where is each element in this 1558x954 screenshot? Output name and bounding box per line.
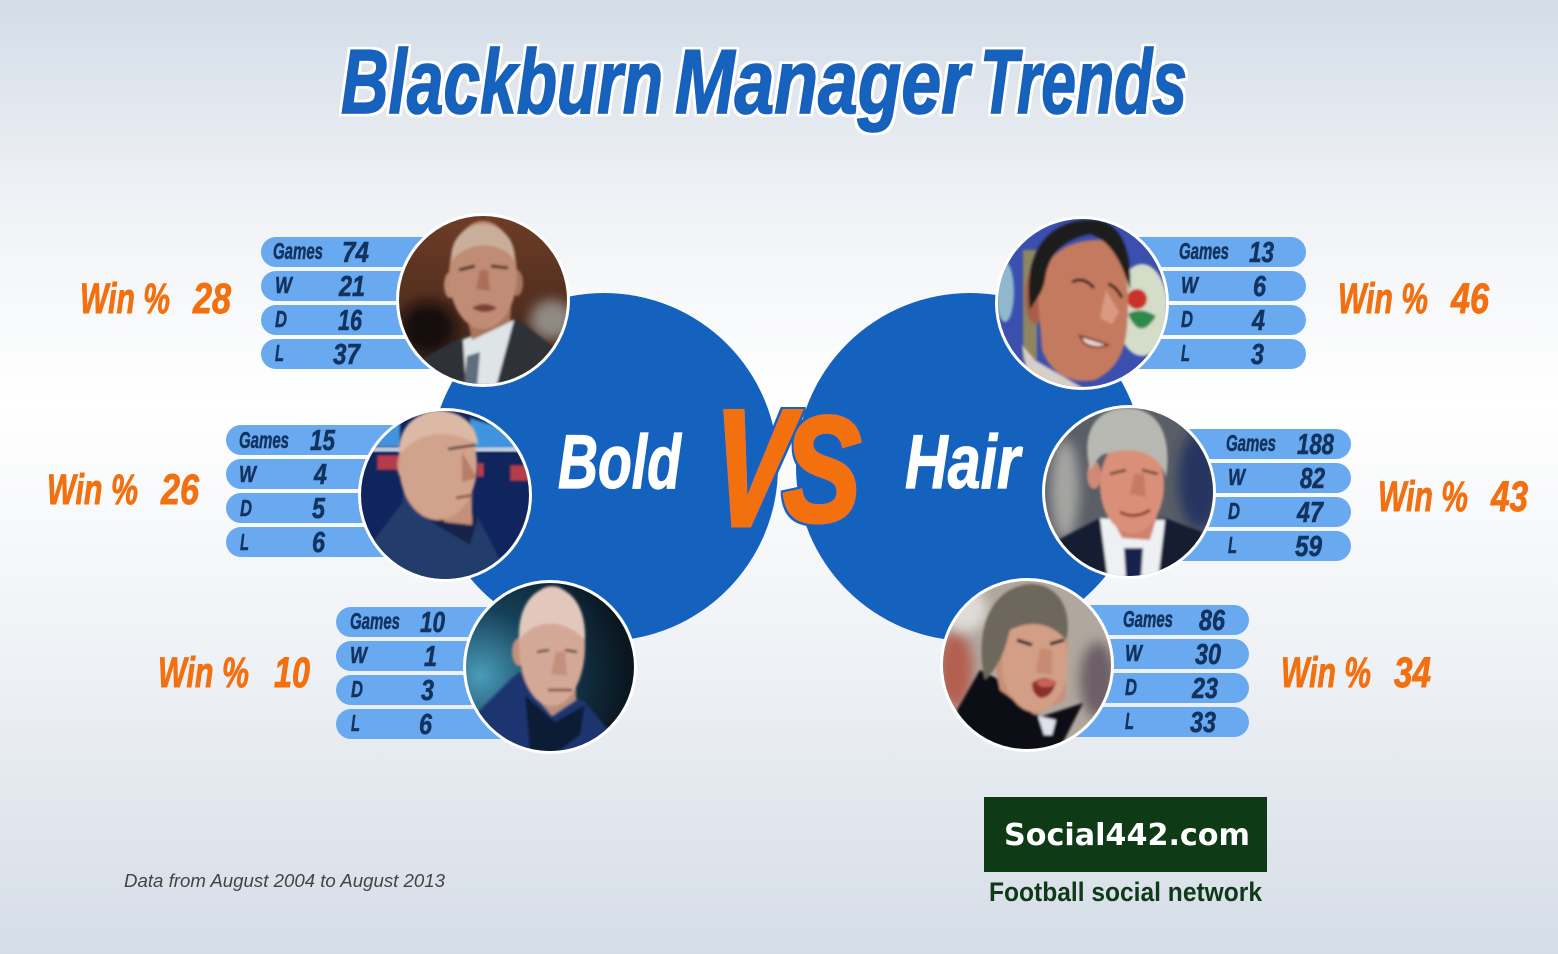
stats: manager bottom right: L [1125,708,1134,734]
VS mark [696,376,861,560]
win percentage: bottom right: Win % [1281,649,1371,697]
win percentage: middle right: Win % [1378,473,1468,521]
logo box: Social442.com [1004,818,1250,853]
stats: manager middle right: Games [1226,430,1276,456]
stats: manager top right: W [1181,272,1200,298]
win percentage: bottom right: 34 [1394,649,1431,697]
stats: manager middle left: 4 [313,459,327,491]
stats: manager top left [261,237,451,371]
stats: manager top right: Games [1179,238,1229,264]
stats: manager top left: W [275,272,294,298]
title: Trends [980,32,1187,133]
portrait: top right manager [995,216,1169,392]
logo box [984,797,1267,872]
stats: manager bottom left: L [351,710,360,736]
heading: Bold: Bold [558,420,682,505]
VS mark: V [696,376,808,560]
stats: manager middle right: W [1228,464,1247,490]
stats: manager middle left: W [239,461,258,487]
portrait: middle right manager [1042,405,1222,582]
stats: manager bottom left: 3 [421,675,434,707]
stats: manager middle right: 82 [1300,463,1325,495]
stats: manager middle right: 47 [1296,497,1325,529]
title: Blackburn [341,32,663,133]
win percentage: middle left: Win % [47,466,138,514]
stats: manager bottom left: D [351,676,363,702]
circle: hair group [796,293,1144,641]
stats: manager top left: Games [273,238,323,264]
stats: manager middle left: 6 [312,527,326,559]
portrait: bottom right manager [937,578,1116,754]
win percentage: bottom left: Win % [158,649,249,697]
stats: manager bottom right: Games [1123,606,1173,632]
stats: manager top left: 21 [338,271,365,303]
win percentage: top right: Win % [1338,275,1428,323]
stats: manager bottom left: 6 [419,709,433,741]
stats: manager top right [1116,237,1306,371]
stats: manager bottom right: W [1125,640,1144,666]
heading: Hair: Hair [905,420,1023,505]
stats: manager top right: 3 [1251,339,1264,371]
stats: manager bottom right: 23 [1191,673,1218,705]
data source note: Data from August 2004 to August 2013 [124,871,445,891]
portrait: bottom left manager [463,580,637,754]
win percentage: top left: Win % [80,275,170,323]
stats: manager bottom right: D [1125,674,1137,700]
stats: manager bottom left: 1 [424,641,437,673]
stats: manager bottom right: 86 [1199,605,1226,637]
stats: manager middle left: L [240,529,249,555]
stats: manager middle left: D [240,495,252,521]
stats: manager top right: 13 [1249,237,1274,269]
stats: manager top right: 4 [1251,305,1265,337]
stats: manager top right: L [1181,340,1190,366]
stats: manager bottom left: W [350,642,369,668]
stats: manager top left: 74 [342,237,369,269]
portrait: middle left manager [358,408,532,582]
win percentage: middle left: 26 [160,466,200,514]
stats: manager top right: 6 [1253,271,1267,303]
stats: manager middle right: L [1228,532,1237,558]
stats: manager bottom right: 33 [1190,707,1216,739]
stats: manager middle right: 188 [1297,429,1335,461]
stats: manager top left: L [275,340,284,366]
stats: manager middle left: 15 [310,425,336,457]
stats: manager bottom right [1059,605,1249,739]
win percentage: top right: 46 [1450,275,1490,323]
circle: bold group [430,293,778,641]
VS mark: S [783,385,861,553]
stats: manager middle right: D [1228,498,1240,524]
title: Manager [675,32,973,133]
stats: manager middle left: Games [239,427,289,453]
win percentage: middle right: 43 [1490,473,1528,521]
portrait: top left manager [396,213,574,392]
stats: manager bottom left [336,607,526,741]
title [341,32,1187,133]
stats: manager middle right: 59 [1295,531,1322,563]
stats: manager middle right [1161,429,1351,563]
stats: manager top left: 16 [338,305,363,337]
stats: manager top left: 37 [333,339,362,371]
stats: manager bottom left: Games [350,608,400,634]
win percentage: top left: 28 [192,275,231,323]
stats: manager middle left [226,425,416,559]
stats: manager middle left: 5 [312,493,326,525]
stats: manager bottom right: 30 [1195,639,1221,671]
stats: manager top right: D [1181,306,1193,332]
stats: manager bottom left: 10 [420,607,445,639]
stats: manager top left: D [275,306,287,332]
win percentage: bottom left: 10 [274,649,310,697]
tagline: Football social network [989,877,1263,907]
